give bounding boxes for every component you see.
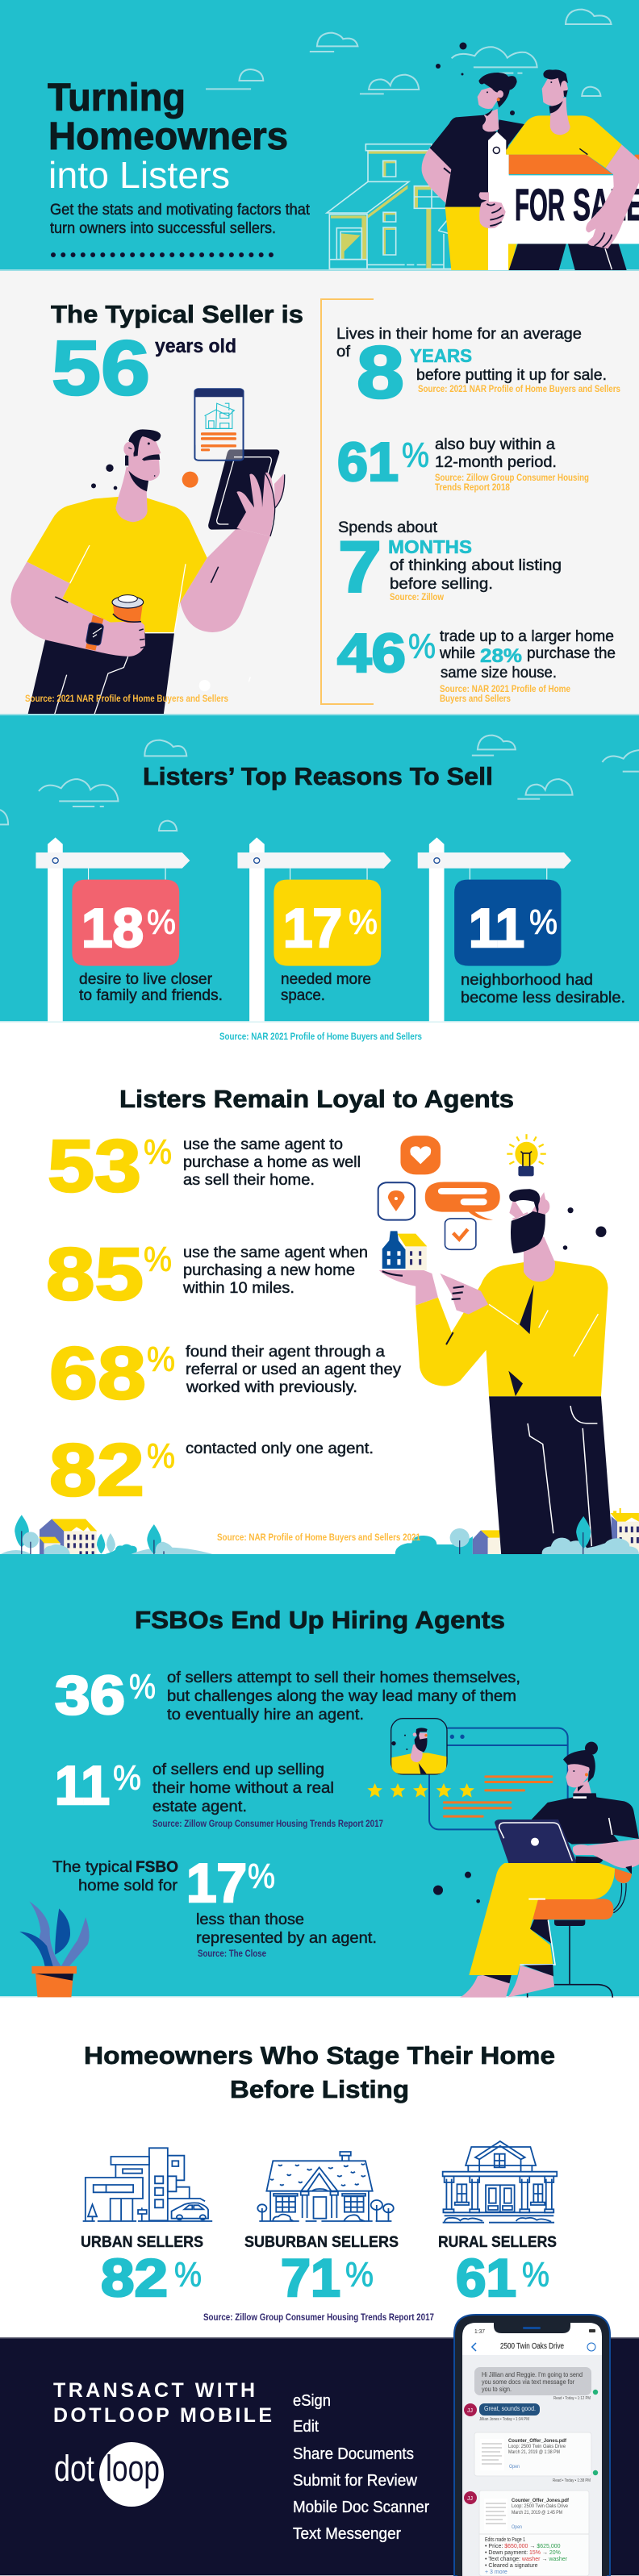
chat: document card 2: Counter_Offer_Jones.pdf bbox=[512, 2498, 570, 2503]
sign: 17%: space. bbox=[281, 987, 325, 1004]
dotted divider bbox=[53, 252, 271, 257]
stat: 85% bbox=[46, 1233, 368, 1315]
chat: document card 1: Read • Today • 1:38 PM bbox=[553, 2478, 591, 2483]
stat: 11%: 11 bbox=[55, 1755, 110, 1816]
icon: urban house bbox=[83, 2148, 212, 2221]
fact: 46%: same size house. bbox=[441, 665, 557, 682]
chat: document card 1: Counter_Offer_Jones.pdf bbox=[508, 2438, 567, 2444]
chat: reply: Great, sounds good. bbox=[484, 2405, 536, 2412]
icon: speech bubble bbox=[425, 1182, 500, 1220]
value: % bbox=[345, 2256, 374, 2295]
column: urban sellers bbox=[81, 2148, 212, 2307]
fact: 46%: 46 bbox=[337, 623, 406, 684]
column: suburban sellers bbox=[244, 2152, 399, 2307]
sign: 11%: 11 bbox=[469, 898, 524, 959]
fact: 61%: Trends Report 2018 bbox=[435, 483, 511, 493]
icon: location pin bbox=[378, 1182, 415, 1220]
heading bbox=[53, 2379, 272, 2427]
stat: 82%: % bbox=[147, 1437, 175, 1476]
value bbox=[456, 2248, 549, 2307]
phone mockup: 1:37 bbox=[474, 2329, 485, 2335]
stat: 17%: The typical bbox=[52, 1859, 132, 1876]
fact: 46% bbox=[337, 623, 616, 704]
chat: first message: you some docs via text message for bbox=[482, 2378, 574, 2386]
illustration: woman reviewing agent on laptop bbox=[367, 1719, 639, 1998]
chat: document card 1: Loop: 2500 Twin Oaks Drive bbox=[508, 2444, 566, 2449]
stat: 82%: contacted only one agent. bbox=[186, 1440, 374, 1457]
sign: 18%: to family and friends. bbox=[79, 987, 223, 1004]
fact: 8 years: Lives in their home for an average bbox=[336, 326, 582, 343]
chat: first message: you to sign. bbox=[482, 2386, 512, 2393]
pants bbox=[27, 633, 174, 715]
hands and house bbox=[379, 1231, 488, 1315]
sign: 18% bbox=[36, 837, 223, 1022]
illustration: man with tablet bbox=[10, 429, 285, 715]
stat: 36%: but challenges along the way lead many of them bbox=[167, 1688, 516, 1705]
heading: DOTLOOP MOBILE bbox=[53, 2404, 272, 2427]
chat: reply: Jillian Jones • Today • 1:34 PM bbox=[479, 2417, 529, 2422]
stat: 17%: represented by an agent. bbox=[196, 1930, 377, 1947]
icon: checkmark bbox=[445, 1219, 476, 1249]
stat: 53%: 53 bbox=[48, 1125, 141, 1207]
fact: 46%: trade up to a larger home bbox=[440, 628, 614, 645]
source: Source: 2021 NAR Profile of Home Buyers and Sellers bbox=[25, 694, 228, 704]
woman's hand bbox=[479, 192, 506, 228]
fact: 46%: 28% bbox=[480, 645, 522, 667]
subtitle: turn owners into successful sellers. bbox=[50, 220, 276, 237]
woman bbox=[422, 73, 524, 270]
fact: 8 years: of bbox=[336, 344, 351, 361]
chat: reply bbox=[464, 2403, 540, 2422]
value: 61 bbox=[456, 2248, 516, 2307]
sign: 18%: % bbox=[147, 903, 176, 942]
stat: 68%: referral or used an agent they bbox=[186, 1361, 402, 1378]
feature list: eSign bbox=[293, 2392, 331, 2410]
illustration: potted plant bbox=[19, 1901, 90, 1997]
sign: 17%: 17 bbox=[283, 898, 342, 959]
panel: hero bbox=[0, 0, 639, 271]
lower arm with watch and cup bbox=[10, 562, 145, 657]
heading: Before Listing bbox=[230, 2075, 409, 2103]
illustration: agent with house and icons bbox=[378, 1134, 613, 1555]
chat: document card 2: Open bbox=[512, 2525, 522, 2530]
sign: 18%: desire to live closer bbox=[79, 971, 213, 988]
illustration: house line art bbox=[327, 144, 452, 269]
sign: 17% bbox=[237, 837, 391, 1022]
chat: document card 2: Edits made to Page 1 bbox=[485, 2537, 525, 2543]
stat: 11%: their home without a real bbox=[152, 1780, 334, 1797]
heading: The Typical Seller is bbox=[51, 300, 303, 328]
chat: document card 2: Loop: 2500 Twin Oaks Drive bbox=[512, 2503, 568, 2509]
stat: 85%: within 10 miles. bbox=[182, 1280, 294, 1297]
shirt bbox=[27, 497, 207, 633]
fact: 7 months bbox=[338, 519, 562, 608]
stat: 53% bbox=[48, 1125, 361, 1207]
stat: 36%: to eventually hire an agent. bbox=[167, 1707, 364, 1724]
fact: 46%: Buyers and Sellers bbox=[440, 694, 511, 704]
source: Source: Zillow Group Consumer Housing Trends Report 2017 bbox=[203, 2313, 434, 2323]
stat: 11%: of sellers end up selling bbox=[152, 1761, 324, 1778]
fact: 7 months: 7 bbox=[338, 527, 382, 608]
chat: document card 1: March 21, 2019 @ 1:38 PM bbox=[508, 2449, 560, 2455]
fact: 7 months: MONTHS bbox=[388, 536, 472, 557]
stat: 53%: % bbox=[144, 1133, 172, 1172]
subtitle: Get the stats and motivating factors that bbox=[50, 202, 311, 219]
fact: 7 months: Spends about bbox=[338, 519, 438, 536]
value: % bbox=[522, 2256, 549, 2295]
stat: age 56: years old bbox=[155, 336, 236, 357]
for sale text: FOR bbox=[515, 179, 565, 230]
stat: 17%: % bbox=[248, 1857, 275, 1896]
value: 82 bbox=[101, 2248, 168, 2307]
value: % bbox=[174, 2256, 202, 2295]
panel: the typical seller bbox=[0, 271, 639, 715]
stat: 17%: FSBO bbox=[136, 1859, 178, 1876]
chat: first message bbox=[474, 2367, 598, 2401]
column: rural sellers bbox=[438, 2141, 557, 2307]
stat: 36%: 36 bbox=[55, 1665, 125, 1726]
heading bbox=[84, 2041, 555, 2103]
stat: 17%: less than those bbox=[196, 1911, 304, 1928]
icon: rural house bbox=[443, 2141, 557, 2223]
value bbox=[281, 2248, 374, 2307]
feature list: Text Messenger bbox=[293, 2525, 401, 2543]
chat: document card 2: March 21, 2019 @ 1:45 PM bbox=[512, 2510, 562, 2516]
panel: FSBOs bbox=[0, 1554, 639, 1998]
fact: 61%: also buy within a bbox=[435, 436, 555, 453]
chat: document card 2: JJ bbox=[467, 2496, 473, 2502]
stat: 36%: of sellers attempt to sell their homes themselves, bbox=[167, 1669, 520, 1686]
title: into Listers bbox=[48, 154, 230, 196]
feature list: Submit for Review bbox=[293, 2472, 418, 2490]
label: URBAN SELLERS bbox=[81, 2234, 203, 2251]
heading: Listers’ Top Reasons To Sell bbox=[143, 762, 493, 790]
chat: first message: Read • Today • 1:12 PM bbox=[553, 2396, 591, 2401]
title: Turning bbox=[48, 77, 186, 119]
source: reasons: Source: NAR 2021 Profile of Home Buyers and Sellers bbox=[219, 1032, 422, 1042]
raised arm, tablet and hand bbox=[180, 449, 285, 632]
illustration: foreground bushes bbox=[542, 1516, 639, 1554]
panel: dotloop mobile bbox=[0, 2315, 639, 2576]
stat: 11%: Source: Zillow Group Consumer Housing Trends Report 2017 bbox=[152, 1819, 383, 1829]
phone mockup bbox=[454, 2315, 610, 2576]
stat: 11%: estate agent. bbox=[152, 1799, 247, 1815]
logo: dotloop: loop bbox=[106, 2448, 160, 2489]
sign: 18%: 18 bbox=[81, 898, 144, 959]
fact: 61%: 12-month period. bbox=[435, 454, 557, 471]
logo: dotloop bbox=[54, 2442, 164, 2507]
fact: 46%: while bbox=[439, 645, 475, 662]
stat: 68% bbox=[49, 1332, 402, 1415]
heading: Homeowners Who Stage Their Home bbox=[84, 2041, 555, 2070]
decorative dots bbox=[436, 42, 515, 115]
source: Source: NAR Profile of Home Buyers and Sellers 2021 bbox=[217, 1533, 421, 1543]
fact: 8 years: before putting it up for sale. bbox=[416, 367, 607, 384]
stat: 53%: purchase a home as well bbox=[183, 1154, 361, 1171]
fact: 61% bbox=[337, 431, 589, 493]
icon: heart bbox=[400, 1136, 441, 1174]
chat: document card 2: • Text change: washer → washer bbox=[485, 2557, 568, 2562]
chat: document card 2: + 3 more bbox=[485, 2570, 507, 2575]
stat: 11% bbox=[55, 1755, 383, 1829]
agent photo bbox=[391, 1719, 447, 1774]
illustration: phone screen card bbox=[194, 389, 244, 461]
heading: Listers Remain Loyal to Agents bbox=[119, 1085, 514, 1113]
fact: 8 years: YEARS bbox=[410, 345, 472, 366]
stat: 82%: 82 bbox=[49, 1429, 144, 1511]
clouds bbox=[206, 10, 612, 96]
fact: 7 months: before selling. bbox=[390, 576, 493, 593]
stat: 68%: % bbox=[147, 1340, 175, 1379]
fact: 61%: 61 bbox=[337, 431, 399, 493]
chat: first message: Hi Jillian and Reggie. I'm going to send bbox=[482, 2371, 583, 2378]
fact: 7 months: of thinking about listing bbox=[390, 557, 562, 574]
sign: 17%: needed more bbox=[281, 971, 371, 988]
chat: document card 2: • Price: $650,000 → $625,000 bbox=[485, 2544, 561, 2549]
sign: 17%: % bbox=[349, 903, 378, 942]
stat: 68%: found their agent through a bbox=[186, 1344, 385, 1361]
rating stars bbox=[367, 1783, 474, 1798]
stat: age 56: 56 bbox=[52, 325, 150, 411]
sign: 11%: % bbox=[529, 903, 558, 942]
fact: 61%: % bbox=[402, 436, 429, 475]
panel: top reasons to sell bbox=[0, 714, 639, 1023]
stat: age 56 bbox=[52, 325, 236, 411]
fact: 8 years bbox=[336, 326, 620, 414]
panel: staging bbox=[81, 2041, 557, 2323]
stat: 68%: worked with previously. bbox=[186, 1379, 357, 1396]
label: RURAL SELLERS bbox=[438, 2234, 557, 2251]
fact: 46%: % bbox=[408, 627, 436, 666]
fact: 46%: Source: NAR 2021 Profile of Home bbox=[440, 685, 570, 694]
illustration: town scene bbox=[0, 1508, 639, 1554]
stat: 53%: as sell their home. bbox=[183, 1172, 315, 1189]
chat: document card 1: Open bbox=[509, 2465, 520, 2470]
stat: 36% bbox=[55, 1665, 520, 1726]
illustration: couple holding for-sale sign bbox=[422, 73, 639, 270]
icon: suburban house bbox=[257, 2152, 394, 2221]
clouds bbox=[0, 736, 639, 831]
stat: 68%: 68 bbox=[49, 1332, 146, 1415]
title bbox=[48, 77, 288, 196]
sign: 11%: neighborhood had bbox=[461, 972, 593, 989]
feature list: Edit bbox=[293, 2418, 319, 2436]
heading: FSBOs End Up Hiring Agents bbox=[135, 1606, 505, 1634]
logo: dotloop: dot bbox=[54, 2448, 94, 2489]
chat: document card 1 bbox=[474, 2432, 598, 2483]
subtitle bbox=[50, 202, 311, 237]
feature list bbox=[293, 2392, 429, 2543]
stat: 85%: purchasing a new home bbox=[183, 1262, 355, 1279]
stat: 82% bbox=[49, 1429, 374, 1511]
title: Homeowners bbox=[48, 115, 288, 158]
stat: 17%: home sold for bbox=[78, 1878, 178, 1894]
fact: 8 years: 8 bbox=[357, 331, 404, 414]
sign post and board bbox=[488, 131, 639, 270]
phone mockup: 2500 Twin Oaks Drive bbox=[500, 2342, 564, 2351]
sign: 11% bbox=[418, 837, 625, 1022]
panel: loyal to agents bbox=[0, 1085, 639, 1555]
chat: document card 2: • Down payment: 15% → 20% bbox=[485, 2550, 561, 2556]
fact: 46%: purchase the bbox=[527, 645, 616, 662]
sign: 11%: become less desirable. bbox=[461, 990, 625, 1007]
feature list: Mobile Doc Scanner bbox=[293, 2499, 429, 2516]
fact: 7 months: Source: Zillow bbox=[390, 593, 444, 602]
browser window with reviews bbox=[429, 1728, 568, 1829]
stat: 85%: % bbox=[144, 1240, 172, 1279]
man bbox=[506, 69, 639, 270]
fact: 61%: Source: Zillow Group Consumer Housing bbox=[435, 473, 589, 483]
man bbox=[416, 1189, 613, 1555]
value: 71 bbox=[281, 2248, 340, 2307]
stat: 17%: 17 bbox=[186, 1853, 247, 1914]
icon: light bulb bbox=[507, 1134, 546, 1176]
label: SUBURBAN SELLERS bbox=[244, 2234, 399, 2251]
heading: TRANSACT WITH bbox=[53, 2379, 255, 2402]
stat: 11%: % bbox=[113, 1759, 141, 1798]
value bbox=[101, 2248, 202, 2307]
feature list: Share Documents bbox=[293, 2445, 414, 2463]
stat: 85%: use the same agent when bbox=[183, 1244, 368, 1261]
head bbox=[115, 429, 161, 522]
stat: 36%: % bbox=[129, 1668, 156, 1707]
chat: document card 2 bbox=[464, 2491, 589, 2576]
stat: 53%: use the same agent to bbox=[183, 1136, 343, 1153]
chat: document card 2: • Cleared a signature bbox=[485, 2563, 538, 2569]
woman bbox=[460, 1742, 639, 1998]
stat: 17%: Source: The Close bbox=[198, 1949, 266, 1959]
bracket bbox=[321, 299, 374, 704]
chat: reply: JJ bbox=[467, 2408, 473, 2414]
stat: 85%: 85 bbox=[46, 1233, 144, 1315]
stat: 17% bbox=[52, 1853, 377, 1959]
